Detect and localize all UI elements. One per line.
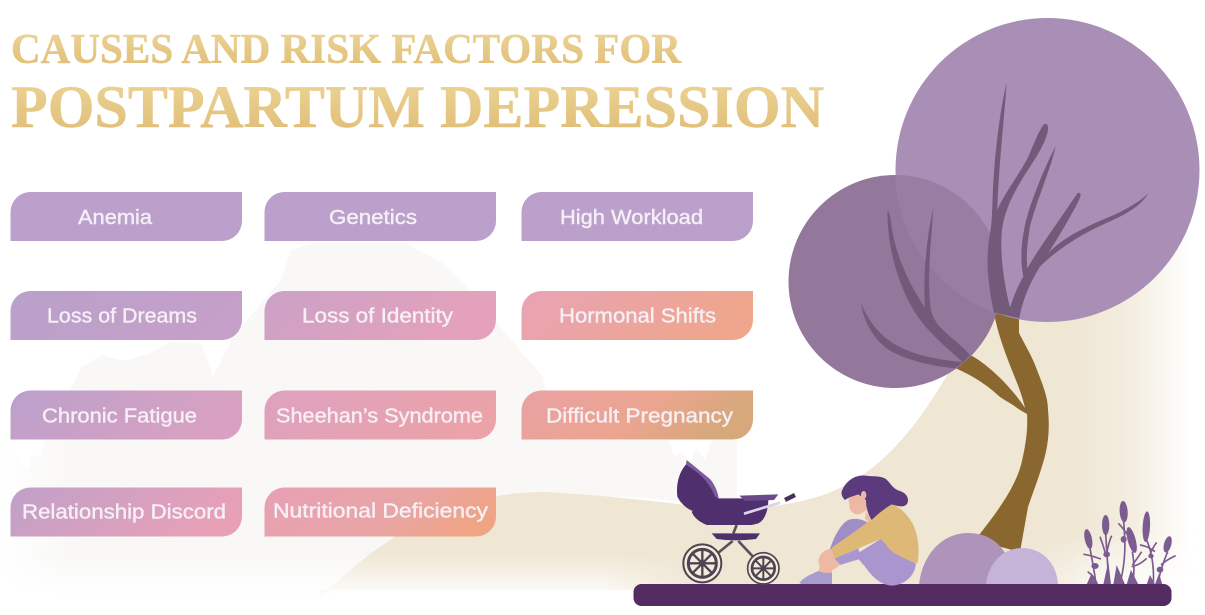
button: Difficult Pregnancy: [522, 390, 753, 440]
hair: [842, 476, 908, 520]
ground platform: [634, 584, 1172, 606]
button: Hormonal Shifts: Hormonal Shifts: [559, 306, 716, 328]
button: Difficult Pregnancy: Difficult Pregnancy: [546, 406, 733, 428]
title line 2: POSTPARTUM DEPRESSION: [11, 74, 824, 140]
button: Sheehan's Syndrome: Sheehan’s Syndrome: [276, 406, 483, 428]
button: Nutritional Deficiency: Nutritional Deficiency: [273, 500, 488, 522]
stroller wheels and frame: [683, 525, 779, 584]
far leg: [829, 519, 870, 565]
hill and mountain bottom fade, left: [63, 560, 677, 600]
button: Loss of Dreams: Loss of Dreams: [47, 306, 197, 328]
button: Loss of Identity: Loss of Identity: [302, 306, 453, 328]
risk factor buttons: [10, 192, 753, 536]
title: [11, 27, 824, 140]
button: Loss of Identity: [264, 291, 496, 340]
right main limb: [988, 83, 1048, 318]
lavender stems: [1083, 522, 1176, 583]
rocks: [919, 533, 1058, 585]
right side limbs: [1010, 146, 1148, 318]
basket hood: [739, 494, 778, 501]
stroller basket: [692, 498, 768, 525]
button: Chronic Fatigue: Chronic Fatigue: [42, 406, 197, 428]
canopy trim: [686, 460, 719, 498]
button: Chronic Fatigue: [10, 390, 242, 440]
near leg and hip: [855, 539, 916, 586]
lavender flowers: [1083, 501, 1173, 573]
large rock: [919, 533, 1005, 585]
button: Genetics: Genetics: [329, 207, 417, 229]
canopy overlap: [896, 175, 994, 312]
stroller handle: [744, 503, 780, 514]
ankle: [818, 565, 832, 573]
stroller canopy: [677, 464, 718, 512]
stroller: [677, 460, 795, 584]
button: Relationship Discord: [10, 488, 242, 536]
button: Hormonal Shifts: [522, 291, 753, 340]
small rock: [986, 548, 1058, 585]
sweater: [832, 504, 919, 563]
button: Loss of Dreams: [10, 291, 242, 340]
tree: [788, 18, 1200, 552]
canopy branches: [861, 83, 1148, 368]
lavender plants: [1083, 501, 1176, 584]
ear: [861, 491, 866, 499]
left long limb: [887, 208, 970, 363]
button: Sheehan's Syndrome: [264, 390, 496, 440]
hill bottom fade, right: [1050, 548, 1174, 590]
button: High Workload: [522, 192, 753, 241]
shin under arm: [833, 548, 862, 565]
hand: [818, 549, 840, 571]
button: High Workload: High Workload: [560, 207, 703, 229]
button: Relationship Discord: Relationship Discord: [22, 502, 226, 524]
shoe: [799, 571, 832, 584]
face: [848, 493, 872, 522]
button: Nutritional Deficiency: [264, 488, 496, 536]
title line 1: CAUSES AND RISK FACTORS FOR: [11, 27, 682, 73]
background: faint mountain silhouette: [0, 243, 737, 600]
left low limb: [861, 303, 963, 368]
background: cream hill: [320, 230, 1200, 600]
right canopy: [896, 18, 1200, 322]
button: Anemia: [10, 192, 242, 241]
seated woman: [799, 476, 919, 586]
button: Genetics: [264, 192, 496, 241]
left canopy: [788, 175, 1002, 388]
tree trunk: [955, 313, 1049, 552]
handle grip: [785, 495, 795, 500]
lavender base leaves: [1087, 562, 1162, 584]
stroller lower tray: [712, 533, 760, 540]
button: Anemia: Anemia: [78, 207, 153, 229]
